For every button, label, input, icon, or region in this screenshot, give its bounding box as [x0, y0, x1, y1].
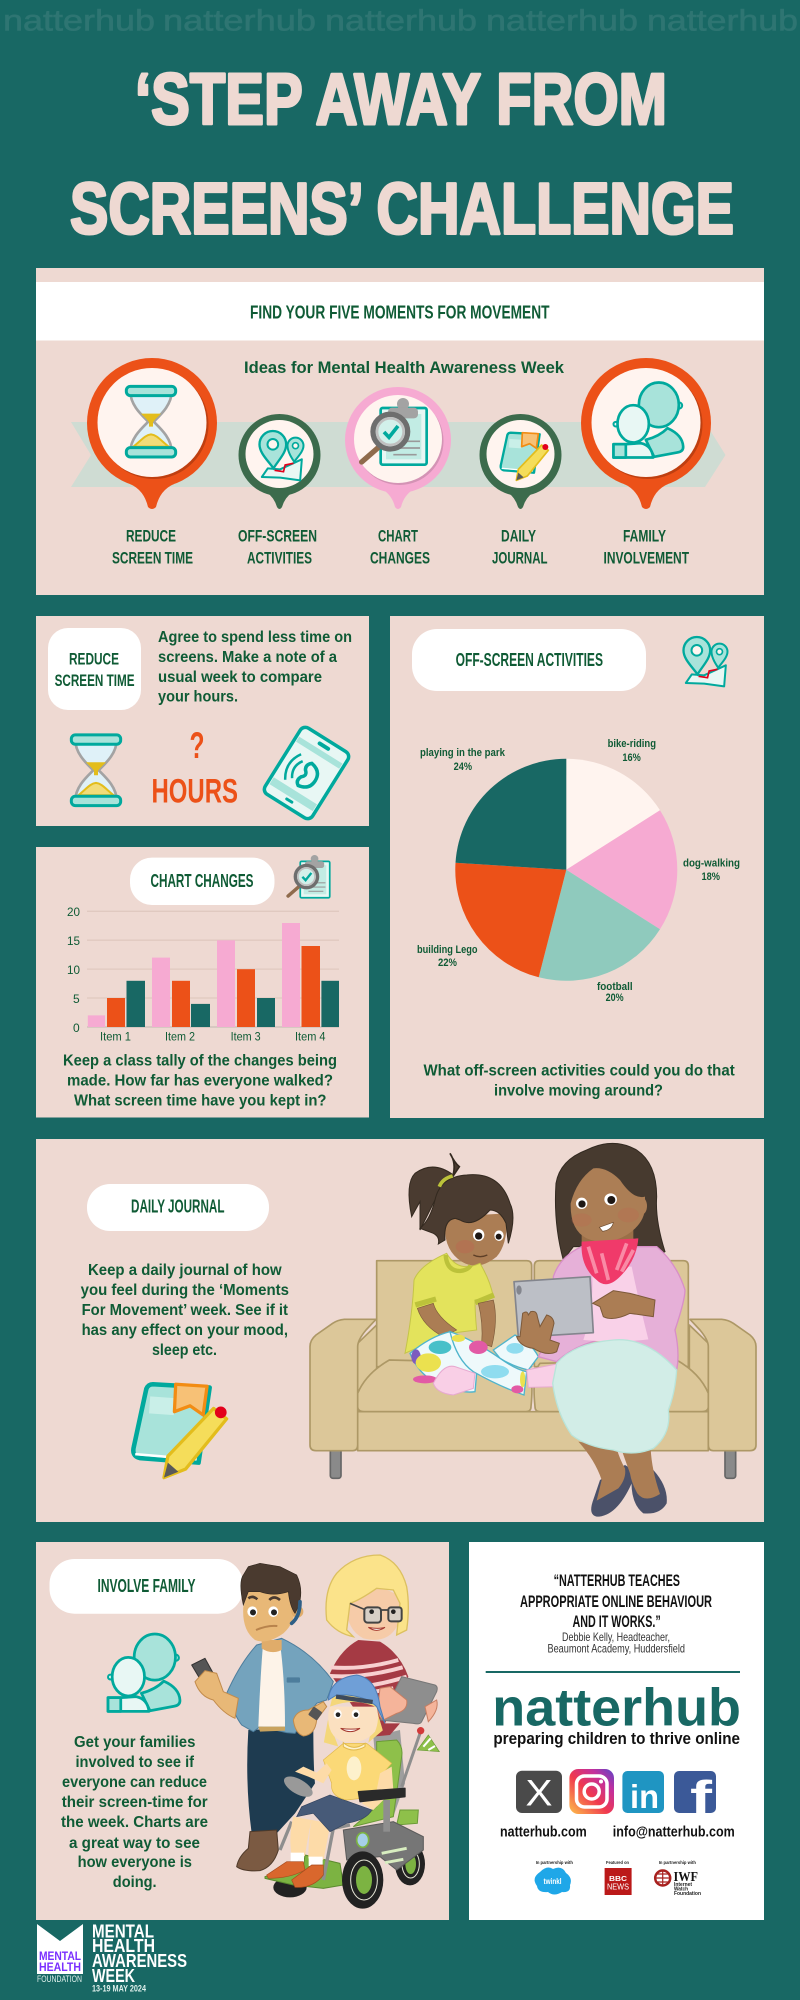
- pin: family involvement: [581, 358, 711, 509]
- ribbon: [71, 422, 726, 487]
- pie labels: 24%: [454, 761, 472, 773]
- heading pill: CHART CHANGES: [150, 871, 254, 891]
- logo: twinkl: twinkl: [544, 1877, 562, 1886]
- icon: Instagram: [569, 1769, 614, 1814]
- body text: What off-screen activities could you do that: [424, 1062, 735, 1080]
- icon: LinkedIn: [622, 1771, 664, 1815]
- pin labels: CHANGES: [370, 549, 430, 568]
- pie labels: football: [597, 981, 633, 993]
- icon: X: [516, 1771, 562, 1814]
- logo: Mental Health Foundation: MENTAL: [39, 1949, 81, 1963]
- logo: Mental Health Foundation: FOUNDATION: [37, 1974, 82, 1985]
- heading pill: [412, 629, 646, 691]
- icon: family: [108, 1634, 180, 1711]
- pin labels: FAMILY: [623, 526, 666, 546]
- heading pill: [48, 628, 141, 710]
- sofa: [310, 1261, 756, 1478]
- body text: For Movement’ week. See if it: [82, 1302, 288, 1319]
- bar chart: Item 3: [231, 1030, 261, 1044]
- bar chart: [67, 905, 339, 1044]
- quote: AND IT WORKS.”: [572, 1612, 661, 1631]
- icon: clipboard and magnifier: [288, 855, 330, 898]
- pin labels: SCREEN TIME: [112, 549, 193, 568]
- pie chart: [455, 759, 677, 981]
- body text: everyone can reduce: [62, 1774, 207, 1791]
- logo: Mental Health Awareness Week: WEEK: [92, 1965, 135, 1986]
- heading pill: [130, 858, 274, 905]
- body text: [158, 629, 352, 706]
- title: ‘STEP AWAY FROM: [135, 60, 667, 140]
- logo: IWF: Internet: [674, 1882, 692, 1888]
- strapline: preparing children to thrive online: [493, 1730, 740, 1748]
- pin labels: JOURNAL: [492, 549, 548, 568]
- logo: BBC News: [605, 1868, 632, 1895]
- bar chart: 5: [73, 992, 80, 1006]
- logo: Mental Health Awareness Week: 13-19 MAY 2024: [92, 1984, 147, 1995]
- heading pill: [50, 1559, 243, 1614]
- title: [70, 60, 734, 250]
- watermark: natterhub repeated: natterhub: [163, 4, 316, 38]
- logo: twinkl: [535, 1868, 571, 1894]
- contact links: natterhub.com: [500, 1825, 587, 1841]
- bar chart: Item 2: [165, 1030, 195, 1044]
- logo: IWF: Watch: [674, 1887, 688, 1893]
- logo: IWF: Foundation: [674, 1891, 701, 1897]
- icon: LinkedIn: in: [630, 1778, 659, 1815]
- logo: BBC News: BBC: [609, 1876, 627, 1883]
- illustration: family with wheelchair: [192, 1555, 439, 1909]
- body text: how everyone is: [78, 1854, 192, 1871]
- question mark: ?: [190, 725, 204, 766]
- panel: off-screen activities: [390, 616, 764, 1118]
- bar chart: Item 4: [295, 1030, 326, 1044]
- heading pill: DAILY JOURNAL: [131, 1197, 224, 1217]
- blonde woman: [326, 1555, 437, 1817]
- body text: sleep etc.: [152, 1342, 217, 1359]
- icon: map pins: [683, 637, 727, 686]
- pin labels: REDUCE: [126, 526, 176, 546]
- body text: doing.: [113, 1874, 157, 1891]
- watermark: natterhub repeated: natterhub: [325, 4, 477, 38]
- subheading: Ideas for Mental Health Awareness Week: [244, 359, 565, 377]
- heading pill: [87, 1184, 269, 1231]
- pin: reduce screen time: [87, 358, 217, 509]
- heading pill: OFF-SCREEN ACTIVITIES: [456, 650, 603, 670]
- icon: X: X: [526, 1772, 552, 1814]
- pie labels: 18%: [702, 871, 720, 883]
- panel: reduce screen time: [36, 616, 369, 826]
- bar chart: 10: [67, 963, 80, 977]
- woman: [514, 1143, 685, 1517]
- pie labels: 16%: [622, 752, 641, 764]
- logo: Mental Health Awareness Week: [92, 1920, 187, 1995]
- watermark: natterhub repeated: [3, 4, 798, 38]
- body text: their screen-time for: [62, 1794, 208, 1811]
- pin labels: DAILY: [501, 526, 536, 546]
- partner captions: [536, 1860, 696, 1865]
- body text: involved to see if: [76, 1754, 195, 1771]
- watermark: natterhub repeated: natterhub: [647, 4, 798, 38]
- body text: What screen time have you kept in?: [74, 1092, 326, 1110]
- partner captions: Featured on: [606, 1860, 629, 1865]
- pie labels: building Lego: [417, 944, 478, 956]
- header band: [36, 282, 764, 340]
- pin labels: ACTIVITIES: [247, 549, 312, 568]
- pie labels: bike-riding: [608, 738, 656, 750]
- pin labels: [112, 526, 689, 568]
- body text: you feel during the ‘Moments: [81, 1282, 289, 1299]
- pie labels: 20%: [606, 992, 624, 1004]
- hours label: HOURS: [152, 772, 238, 810]
- pin: off-screen activities: [238, 414, 320, 509]
- heading pill: INVOLVE FAMILY: [98, 1576, 196, 1596]
- panel: natterhub testimonial and contacts: [469, 1542, 764, 1920]
- icon: book and pencil: [133, 1384, 227, 1478]
- pin labels: OFF-SCREEN: [238, 526, 317, 546]
- illustration: sofa, girl and woman with tablet: [310, 1143, 756, 1517]
- quote: [520, 1571, 712, 1631]
- logo: Mental Health Foundation: HEALTH: [39, 1960, 81, 1974]
- body text: the week. Charts are: [61, 1814, 208, 1831]
- heading pill: SCREEN TIME: [55, 671, 135, 690]
- quote attribution: Debbie Kelly, Headteacher,: [562, 1630, 670, 1644]
- logo: Mental Health Awareness Week: MENTAL: [92, 1920, 154, 1942]
- quote attribution: Beaumont Academy, Huddersfield: [548, 1642, 685, 1656]
- pin labels: INVOLVEMENT: [604, 549, 689, 568]
- panel: daily journal: [36, 1139, 764, 1522]
- bar chart: 20: [67, 905, 80, 919]
- contact links: [500, 1825, 735, 1841]
- body text: usual week to compare: [158, 669, 322, 686]
- panel: five moments overview: [36, 268, 764, 595]
- body text: [61, 1734, 208, 1891]
- pin: chart changes: [345, 387, 451, 509]
- natterhub logo: natterhub: [492, 1679, 741, 1738]
- contact links: info@natterhub.com: [613, 1825, 735, 1841]
- watermark: natterhub repeated: natterhub: [3, 4, 155, 38]
- pie labels: 22%: [438, 957, 457, 969]
- pin labels: CHART: [378, 526, 418, 546]
- icon: phone: [262, 725, 351, 821]
- body text: your hours.: [158, 689, 238, 706]
- body text: has any effect on your mood,: [82, 1322, 288, 1339]
- logo: Mental Health Awareness Week: AWARENESS: [92, 1950, 187, 1971]
- bar chart: Item 1: [100, 1030, 131, 1044]
- body text: [81, 1262, 289, 1359]
- bar chart: 0: [73, 1021, 80, 1035]
- pie labels: playing in the park: [420, 747, 506, 759]
- watermark: natterhub repeated: natterhub: [486, 4, 638, 38]
- body text: Agree to spend less time on: [158, 629, 352, 646]
- body text: involve moving around?: [494, 1082, 663, 1100]
- logo: IWF: [655, 1870, 701, 1897]
- logo: BBC News: NEWS: [607, 1882, 629, 1892]
- body text: Keep a daily journal of how: [88, 1262, 283, 1279]
- pin: daily journal: [480, 414, 562, 509]
- quote attribution: [548, 1630, 685, 1656]
- body text: [63, 1053, 337, 1110]
- panel: chart changes: [36, 847, 369, 1118]
- header band: FIND YOUR FIVE MOMENTS FOR MOVEMENT: [250, 302, 550, 322]
- partner captions: In partnership with: [536, 1860, 573, 1865]
- body text: Get your families: [74, 1734, 195, 1751]
- girl: [405, 1153, 560, 1395]
- wheelchair and boy: [265, 1675, 439, 1909]
- pie labels: dog-walking: [683, 858, 740, 870]
- body text: screens. Make a note of a: [158, 649, 337, 666]
- icon: Facebook: [674, 1771, 716, 1823]
- logo: IWF: IWF: [674, 1870, 698, 1885]
- partner captions: In partnership with: [659, 1860, 696, 1865]
- body text: Keep a class tally of the changes being: [63, 1053, 337, 1070]
- pie labels: [417, 738, 740, 1004]
- panel: involve family: [36, 1542, 449, 1920]
- bar chart: 15: [67, 934, 80, 948]
- man: [192, 1563, 333, 1871]
- heading pill: REDUCE: [69, 649, 119, 668]
- icon: Facebook: f: [690, 1771, 713, 1823]
- icon: hourglass: [71, 735, 121, 806]
- quote: “NATTERHUB TEACHES: [554, 1571, 680, 1590]
- logo: Mental Health Foundation: [37, 1924, 83, 1985]
- body text: a great way to see: [69, 1835, 200, 1852]
- body text: made. How far has everyone walked?: [67, 1072, 333, 1090]
- logo: Mental Health Awareness Week: HEALTH: [92, 1935, 155, 1956]
- body text: [424, 1062, 735, 1100]
